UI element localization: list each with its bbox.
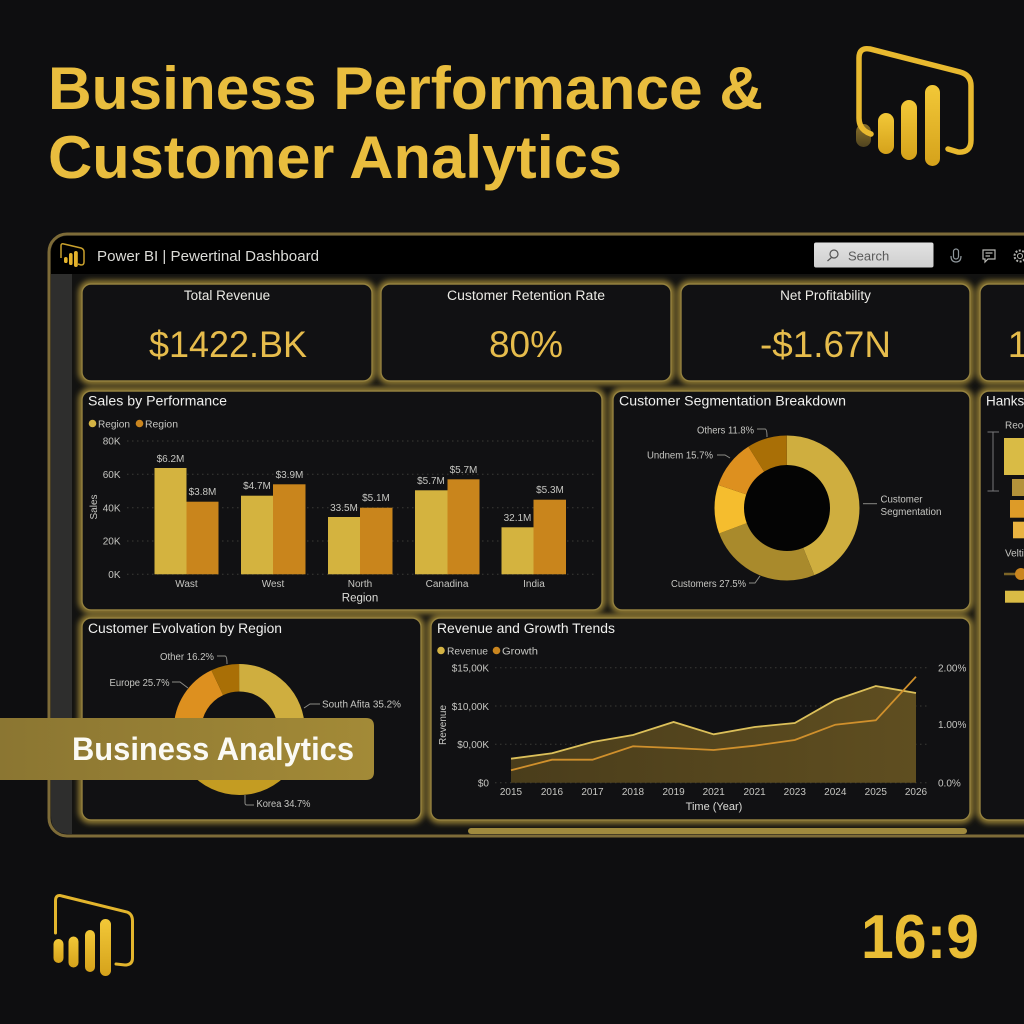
aspect ratio label: 16:9 xyxy=(861,903,979,972)
grid and axes: $10,00K xyxy=(452,702,489,713)
bar value labels: $5.1M xyxy=(362,493,390,504)
KPI card: customer retention: Customer Retention Rate xyxy=(447,288,605,303)
x axis labels: North xyxy=(348,579,372,590)
icon: microphone xyxy=(951,249,961,262)
bar value labels: $5.7M xyxy=(417,476,445,487)
icon: comment xyxy=(983,250,995,262)
year labels: 2023 xyxy=(784,787,806,798)
year labels: 2018 xyxy=(622,787,645,798)
grid and y axis: Sales xyxy=(89,494,100,520)
donut labels: Others 11.8% xyxy=(697,426,754,436)
grid and axes xyxy=(438,664,966,790)
panel: customer segmentation: Customer Segmentation Breakdown xyxy=(619,394,846,408)
bracket xyxy=(988,432,999,491)
legend: Region xyxy=(98,420,130,430)
donut labels: Undnem 15.7% xyxy=(647,450,713,462)
slider xyxy=(1004,568,1024,603)
donut chart xyxy=(729,450,845,566)
search box xyxy=(814,242,934,268)
KPI card: net profitability: -$1.67N xyxy=(760,324,891,365)
search box: Search xyxy=(848,248,889,264)
bar value labels xyxy=(157,454,564,524)
donut labels: Customers 27.5% xyxy=(671,579,746,590)
year labels: 2021 xyxy=(703,787,725,798)
bar value labels: $5.7M xyxy=(450,465,477,476)
KPI card: net profitability xyxy=(681,284,970,381)
legend xyxy=(89,420,178,430)
x axis labels: Wast xyxy=(175,579,198,590)
dashboard frame xyxy=(49,234,1024,836)
year labels: 2026 xyxy=(905,787,928,798)
icon: small Power BI logo xyxy=(54,896,132,976)
panel: revenue and growth trends: Revenue and Growth Trends xyxy=(437,621,615,636)
KPI card: net profitability: Net Profitability xyxy=(780,288,871,303)
year labels xyxy=(500,787,928,813)
KPI card: customer retention: 80% xyxy=(489,324,563,365)
legend: Revenue xyxy=(447,646,488,658)
cropped bars xyxy=(1004,438,1024,538)
x axis labels: West xyxy=(262,579,285,590)
x axis labels: Canadina xyxy=(426,579,469,590)
KPI card: cropped fourth xyxy=(980,284,1024,381)
grid and axes: $0,00K xyxy=(457,740,489,751)
KPI card: total revenue: Total Revenue xyxy=(184,288,270,303)
grid and y axis: 80K xyxy=(103,436,121,448)
bar value labels: 32.1M xyxy=(504,513,531,524)
header bar xyxy=(51,236,1024,274)
card glow layer xyxy=(82,284,1024,820)
legend: Growth xyxy=(502,646,538,658)
grid and axes: $15,00K xyxy=(452,664,489,674)
icon: settings xyxy=(1014,250,1024,262)
bar value labels: $6.2M xyxy=(157,454,184,465)
KPI card: customer retention xyxy=(381,284,671,381)
grid and axes: 0.0% xyxy=(938,778,961,790)
x axis labels xyxy=(175,579,545,604)
donut labels: Customer xyxy=(880,494,923,506)
panel: hanks cropped: Hanks xyxy=(986,394,1024,408)
donut labels: Korea 34.7% xyxy=(256,799,311,810)
donut labels xyxy=(647,426,942,590)
banner: business analytics: Business Analytics xyxy=(72,731,354,767)
year labels: 2015 xyxy=(500,787,523,798)
bar value labels: $3.8M xyxy=(189,487,216,498)
panel: hanks cropped: Velti xyxy=(1005,548,1024,560)
header title: Power BI | Pewertinal Dashboard xyxy=(97,248,319,265)
sidebar xyxy=(51,274,72,834)
x axis labels: Region xyxy=(342,592,378,604)
year labels: 2019 xyxy=(662,787,685,798)
legend: Region xyxy=(145,420,178,430)
title xyxy=(48,55,763,191)
grid and y axis xyxy=(89,436,594,581)
icon: header logo xyxy=(61,244,84,267)
donut labels: Other 16.2% xyxy=(160,652,214,663)
donut chart xyxy=(188,678,291,781)
panel: customer evolution: Customer Evolvation by Region xyxy=(88,621,282,636)
donut labels: Europe 25.7% xyxy=(110,678,170,689)
bar value labels: $4.7M xyxy=(243,481,271,492)
bar value labels: 33.5M xyxy=(330,503,358,514)
bar value labels: $3.9M xyxy=(276,470,303,481)
bar chart xyxy=(154,468,566,574)
area and line chart xyxy=(511,677,916,783)
grid and y axis: 0K xyxy=(108,570,121,581)
banner: business analytics xyxy=(0,718,374,780)
donut labels: South Afita 35.2% xyxy=(322,700,401,710)
grid and axes: Revenue xyxy=(438,705,449,745)
donut labels: Segmentation xyxy=(880,507,942,518)
panel: hanks cropped xyxy=(980,391,1024,820)
grid and axes: $0 xyxy=(478,778,489,790)
year labels: 2021 xyxy=(743,787,766,798)
grid and y axis: 20K xyxy=(103,536,121,548)
donut labels xyxy=(110,652,401,810)
year labels: 2024 xyxy=(824,787,847,798)
KPI card: total revenue: $1422.BK xyxy=(149,324,307,365)
year labels: 2017 xyxy=(581,787,604,798)
panel: sales by performance: Sales by Performance xyxy=(88,394,227,408)
panel: sales by performance xyxy=(82,391,602,610)
grid and y axis: 60K xyxy=(103,470,121,481)
x axis labels: India xyxy=(523,579,545,590)
panel: revenue and growth trends xyxy=(431,618,970,820)
panel: customer evolution xyxy=(82,618,421,820)
year labels: 2016 xyxy=(541,787,564,798)
grid and axes: 1.00% xyxy=(938,720,966,731)
grid and y axis: 40K xyxy=(103,504,121,514)
icon: large Power BI logo xyxy=(856,49,971,166)
year labels: Time (Year) xyxy=(686,801,742,813)
year labels: 2025 xyxy=(865,787,887,798)
panel: customer segmentation xyxy=(613,391,970,610)
grid and axes: 2.00% xyxy=(938,664,966,674)
legend xyxy=(437,646,538,658)
scrollbar xyxy=(468,828,967,834)
bar value labels: $5.3M xyxy=(536,485,564,496)
title: Customer Analytics xyxy=(48,124,622,191)
KPI card: total revenue xyxy=(82,284,372,381)
title: Business Performance & xyxy=(48,55,763,122)
